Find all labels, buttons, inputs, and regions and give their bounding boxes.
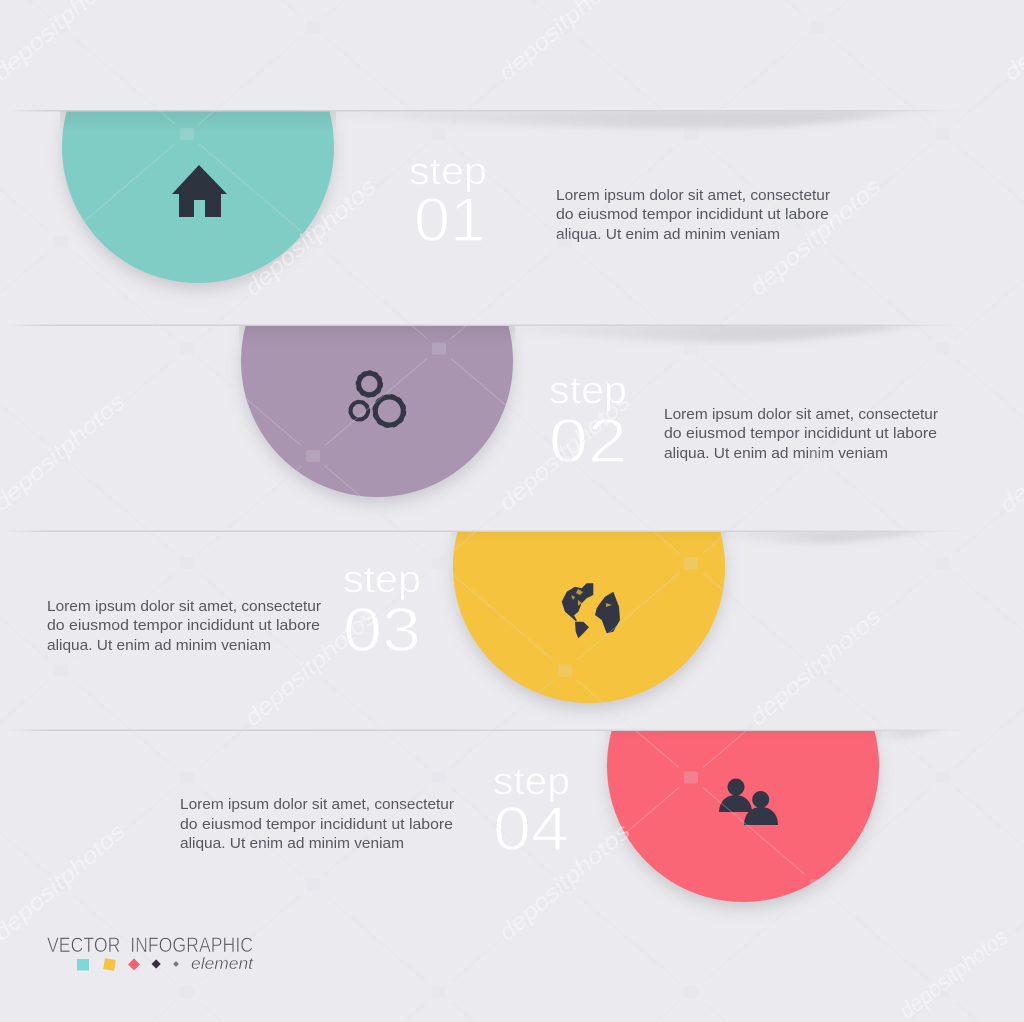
text block 04 (180, 796, 454, 852)
text block 01 (556, 187, 830, 243)
logo title: VECTOR INFOGRAPHIC (47, 934, 253, 957)
text block 02: do eiusmod tempor incididunt ut labore (664, 425, 937, 442)
text block 03 (47, 598, 321, 654)
text block 02: aliqua. Ut enim ad minim veniam (664, 445, 888, 462)
fold lines (5, 110, 965, 731)
panel: step 02 (236, 326, 938, 508)
step number 01: 01 (414, 186, 486, 255)
step number 02: 02 (549, 407, 627, 476)
text block 02: Lorem ipsum dolor sit amet, consectetur (664, 406, 938, 423)
icon: globe (562, 583, 620, 638)
text block 03: aliqua. Ut enim ad minim veniam (47, 637, 271, 654)
text block 03: Lorem ipsum dolor sit amet, consectetur (47, 598, 321, 615)
circle 02 (236, 326, 518, 508)
panel: step 01 (58, 112, 892, 294)
step label 04: step (493, 761, 570, 803)
text block 03: do eiusmod tempor incididunt ut labore (47, 617, 320, 634)
circle 03 (448, 532, 730, 714)
panel: step 03 (48, 532, 915, 714)
watermark text: depositphotos (493, 818, 635, 946)
icon: house (172, 165, 227, 217)
watermark text: depositphotos (894, 923, 1013, 1022)
logo subtitle: element (191, 954, 254, 973)
watermark text: depositphotos (744, 173, 886, 301)
band shadow 02 (574, 326, 900, 343)
logo squares (77, 958, 179, 971)
watermark text: depositphotos (744, 603, 886, 731)
text block 02 (664, 406, 938, 462)
step label 03: step (343, 559, 421, 601)
panel: step 04 (180, 731, 930, 914)
text block 04: do eiusmod tempor incididunt ut labore (180, 816, 453, 833)
step number 03: 03 (343, 596, 421, 665)
watermark text: depositphotos (239, 173, 381, 301)
icon: people (719, 778, 778, 825)
step label 02: step (549, 370, 627, 412)
text block 04: Lorem ipsum dolor sit amet, consectetur (180, 796, 454, 813)
band shadow 03 (758, 532, 915, 544)
band shadow 04 (889, 731, 930, 738)
text block 01: Lorem ipsum dolor sit amet, consectetur (556, 187, 830, 204)
step number 04: 04 (493, 795, 569, 864)
circle 01 (58, 112, 338, 294)
circle 04 (602, 731, 884, 914)
text block 01: aliqua. Ut enim ad minim veniam (556, 226, 780, 243)
text block 04: aliqua. Ut enim ad minim veniam (180, 835, 404, 852)
watermark text: depositphotos (239, 603, 381, 731)
logo: vector infographic element (47, 934, 254, 973)
step label 01: step (409, 151, 487, 193)
icon: gears (349, 371, 405, 427)
watermark text: depositphotos (493, 388, 635, 516)
band shadow 01 (430, 112, 892, 129)
text block 01: do eiusmod tempor incididunt ut labore (556, 206, 829, 223)
